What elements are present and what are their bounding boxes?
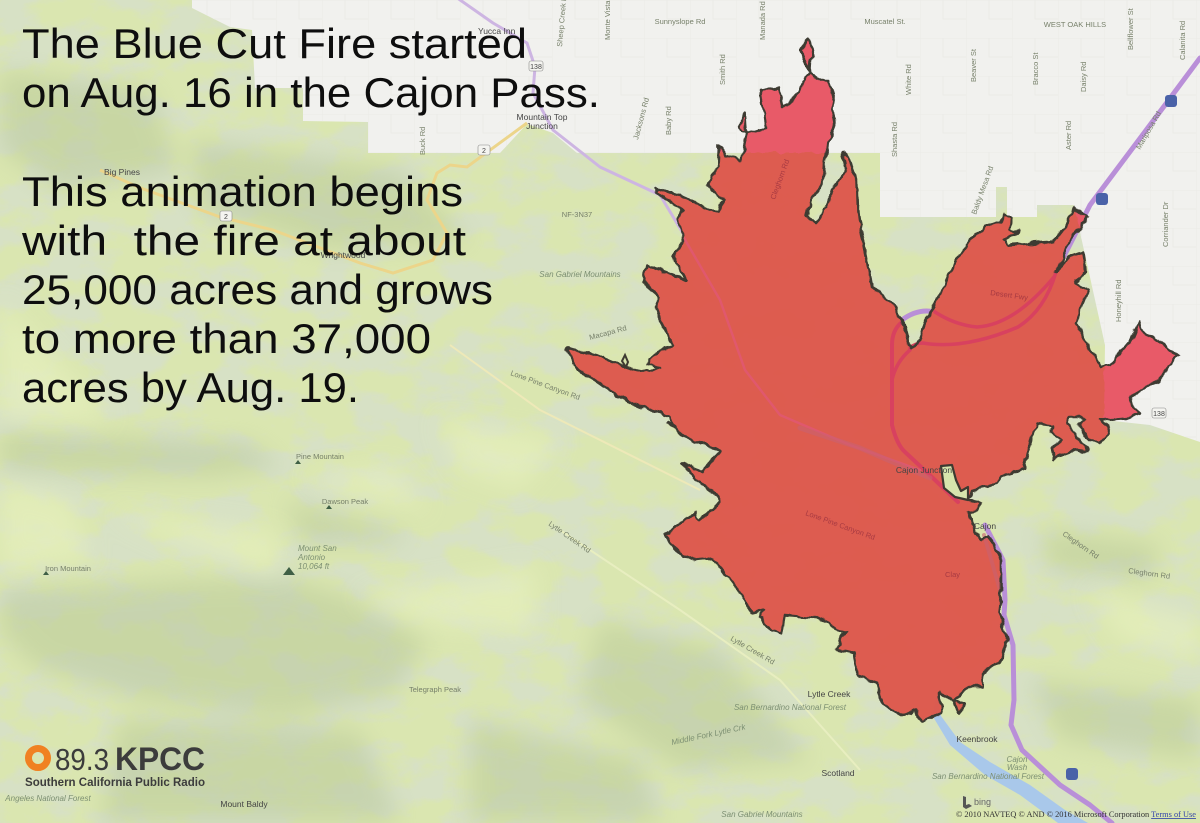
animation description text: with the fire at about — [21, 217, 466, 264]
map labels: Junction — [526, 121, 558, 131]
map labels: Lytle Creek Rd — [729, 634, 776, 666]
map labels: Cajon — [1007, 755, 1028, 764]
bing logo: bing — [974, 797, 991, 807]
headline text — [22, 20, 600, 116]
headline text: The Blue Cut Fire started — [22, 20, 527, 67]
Interstate 15 and highway 138 — [453, 0, 1200, 823]
KPCC logo: 89.3 — [55, 742, 109, 777]
map labels: Manada Rd — [758, 1, 767, 40]
map labels: Lytle Creek Rd — [547, 519, 592, 555]
map labels: San Gabriel Mountains — [721, 810, 803, 819]
map labels: Antonio — [297, 553, 326, 562]
road shields: 2 — [224, 214, 228, 221]
map labels: San Bernardino National Forest — [734, 703, 847, 712]
map labels: Bellflower St — [1126, 7, 1135, 50]
animation description text: to more than 37,000 — [22, 315, 431, 362]
map labels: 10,064 ft — [298, 562, 330, 571]
unburned island west — [622, 355, 628, 367]
map labels: Beaver St — [969, 48, 978, 82]
map labels: Telegraph Peak — [409, 685, 461, 694]
road shields — [220, 61, 1177, 780]
urban area: white map region — [192, 0, 1200, 442]
map labels: Scotland — [821, 768, 855, 778]
map labels: Angeles National Forest — [4, 794, 91, 803]
map labels: Jacksons Rd — [631, 97, 651, 141]
bing logo — [963, 796, 991, 809]
map labels: Desert Fwy — [990, 288, 1029, 302]
road shields: 2 — [482, 148, 486, 155]
map labels: Iron Mountain — [45, 564, 91, 573]
map labels: Mount Baldy — [220, 799, 268, 809]
animation description text: 25,000 acres and grows — [22, 266, 493, 313]
road shields: 138 — [1153, 411, 1165, 418]
map labels: Middle Fork Lytle Crk — [671, 722, 747, 747]
map labels: White Rd — [904, 64, 913, 95]
KPCC logo — [25, 741, 205, 789]
map labels: Honeyhill Rd — [1114, 279, 1123, 322]
map labels: NF-3N37 — [562, 210, 592, 219]
map labels: Clay — [945, 570, 960, 579]
KPCC logo: KPCC — [115, 741, 205, 777]
map labels: Corriander Dr — [1161, 201, 1170, 247]
map labels: Mariposa Rd — [1134, 110, 1163, 151]
map labels: Wrightwood — [321, 250, 366, 260]
animation description text: This animation begins — [22, 168, 463, 215]
map labels: Daisy Rd — [1079, 62, 1088, 92]
map labels: Cleghorn Rd — [1128, 566, 1171, 581]
map labels: San Bernardino National Forest — [932, 772, 1045, 781]
map labels: Macapa Rd — [588, 323, 628, 342]
map labels: Baldy Mesa Rd — [969, 165, 995, 216]
map labels: Wash — [1007, 763, 1028, 772]
map labels: WEST OAK HILLS — [1044, 20, 1106, 29]
mountain peak markers — [43, 460, 332, 575]
map labels: Mount San — [298, 544, 337, 553]
map labels: Lone Pine Canyon Rd — [804, 508, 876, 542]
map labels: Sunnyslope Rd — [655, 17, 705, 26]
map labels: Calanita Rd — [1178, 21, 1187, 60]
map labels: Pine Mountain — [296, 452, 344, 461]
map labels: Big Pines — [104, 167, 140, 177]
headline text: on Aug. 16 in the Cajon Pass. — [22, 69, 600, 116]
map labels: Cleghorn Rd — [1061, 529, 1101, 561]
map labels: Baby Rd — [664, 106, 673, 135]
roads through the fire — [684, 238, 1056, 590]
road shields: 138 — [530, 64, 542, 71]
map labels: Smith Rd — [718, 54, 727, 85]
map labels: Cleghorn Rd — [768, 158, 791, 201]
map labels: Buck Rd — [418, 127, 427, 155]
map labels: Dawson Peak — [322, 497, 368, 506]
map labels: San Gabriel Mountains — [539, 270, 621, 279]
map labels: Bracco St — [1031, 52, 1040, 85]
minor roads — [100, 123, 860, 770]
animation description text — [21, 168, 493, 411]
map labels: Lone Pine Canyon Rd — [509, 368, 581, 402]
map labels: Lytle Creek — [808, 689, 851, 699]
Cajon Wash: water — [932, 693, 1088, 823]
map labels: Muscatel St. — [864, 17, 906, 26]
icon: orange ring — [28, 748, 48, 768]
animation description text: acres by Aug. 19. — [22, 364, 359, 411]
unburned island at Cajon Junction — [941, 465, 968, 500]
map copyright: © 2010 NAVTEQ © AND © 2016 Microsoft Corporation Terms of Use — [956, 810, 1196, 819]
map labels: Yucca Inn — [478, 26, 516, 36]
map labels: Cajon Junction — [896, 465, 952, 475]
fire perimeter — [566, 38, 1178, 722]
map labels: Mountain Top — [517, 112, 568, 122]
map labels: Keenbrook — [956, 734, 998, 744]
map labels: Cajon — [974, 521, 996, 531]
KPCC logo: Southern California Public Radio — [25, 777, 205, 789]
map labels: Aster Rd — [1064, 121, 1073, 150]
map labels: Shasta Rd — [890, 122, 899, 157]
